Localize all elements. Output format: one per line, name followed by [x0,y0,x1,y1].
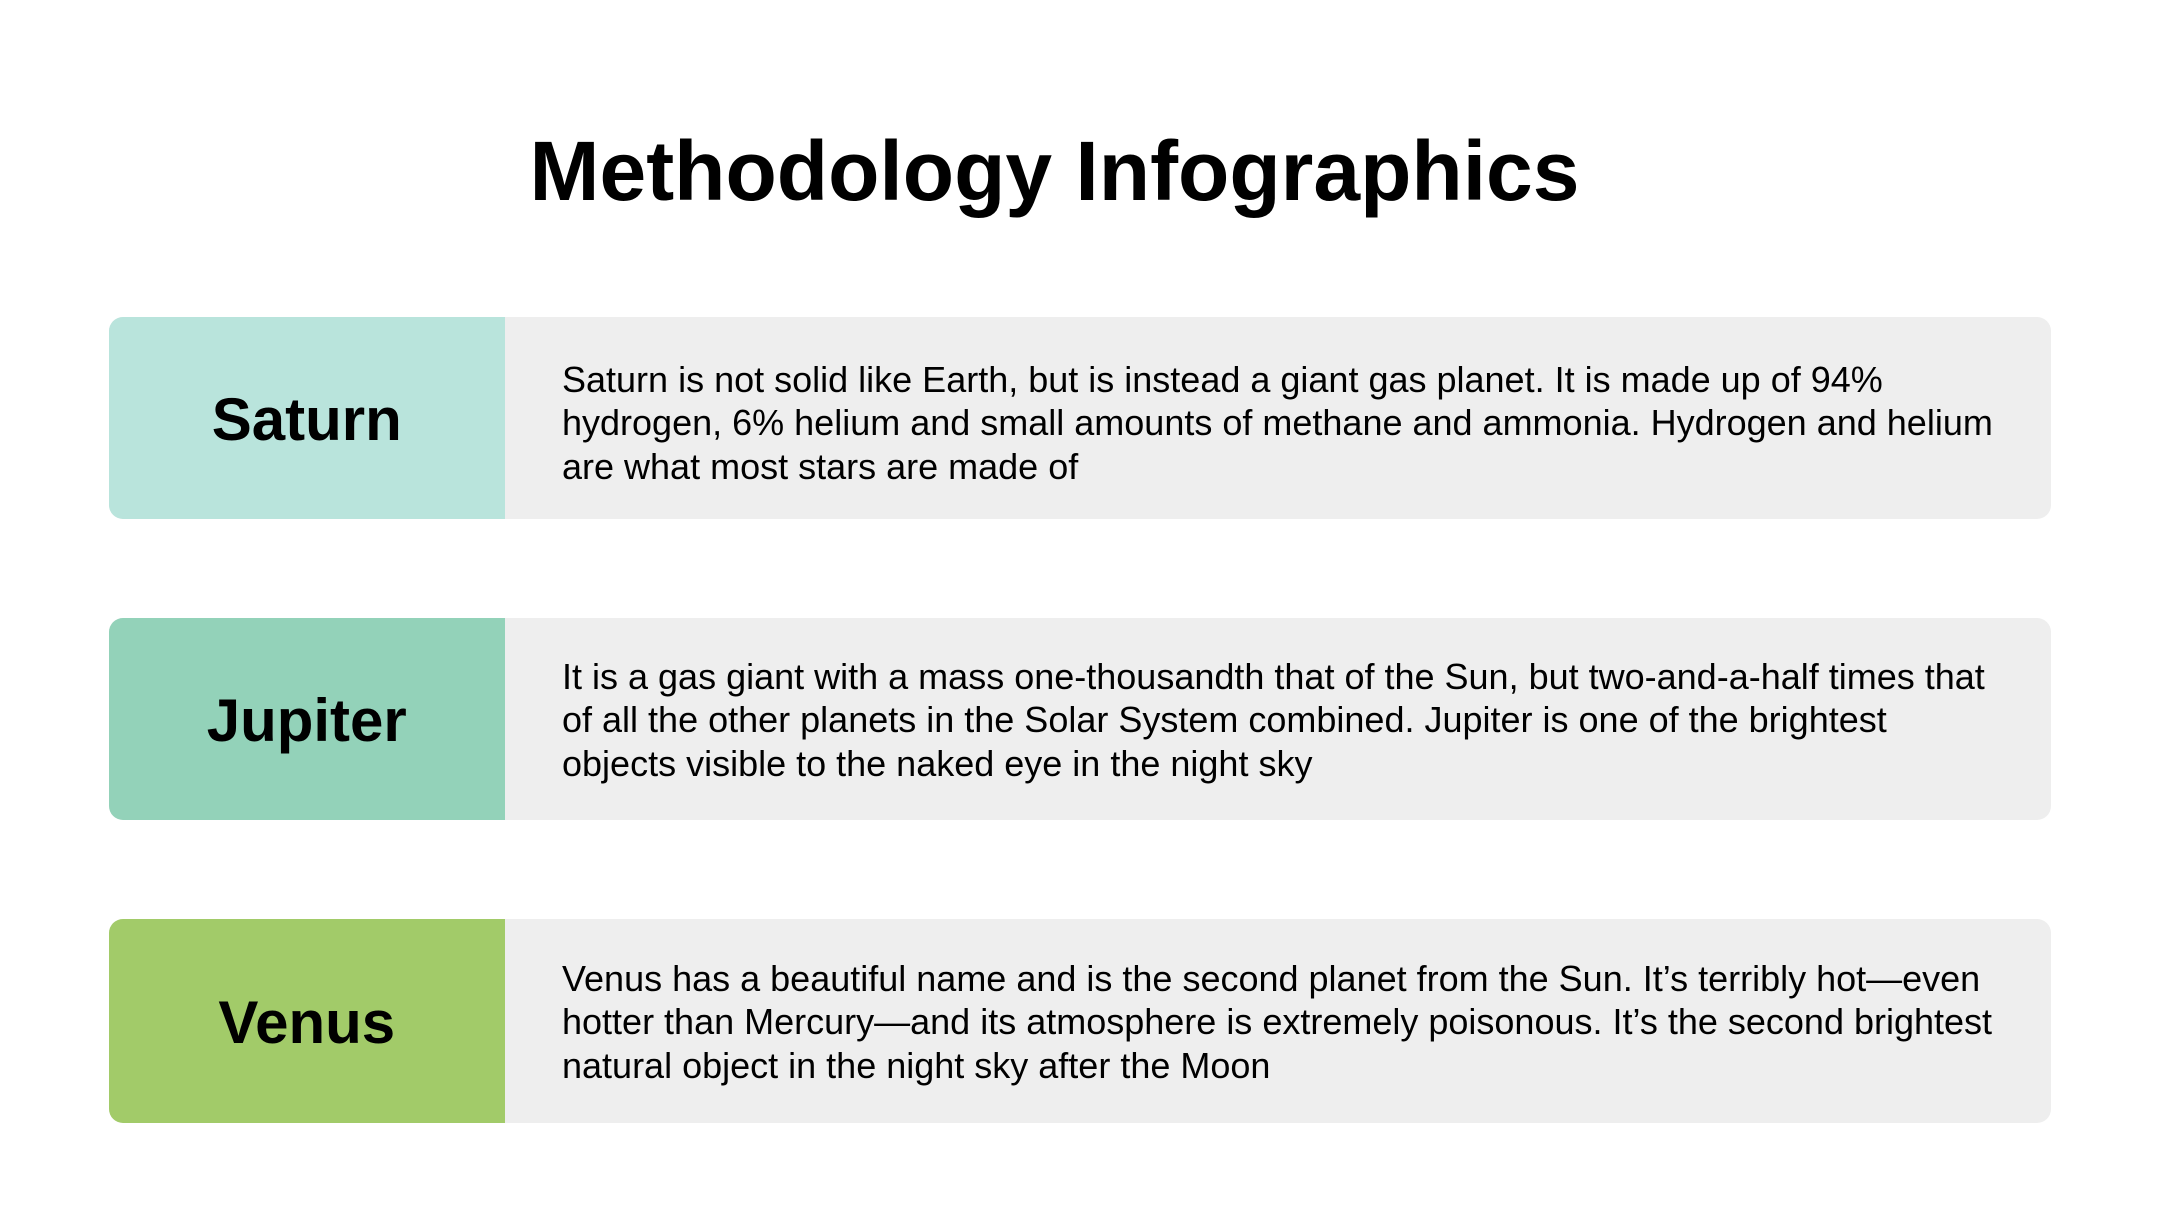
text: Jupiter description: objects visible to the naked eye in the night sky [562,743,1312,784]
text: Venus description: natural object in the night sky after the Moon [562,1045,1270,1086]
text: Jupiter description: It is a gas giant with a mass one-thousandth that of the Sun, but two-and-a-half times that [562,656,1985,697]
text: Saturn description: Saturn is not solid like Earth, but is instead a giant gas planet. It is made up of 94% [562,359,1883,400]
text: Saturn description: hydrogen, 6% helium and small amounts of methane and ammonia. Hydrogen and helium [562,402,1993,443]
label: Saturn [109,317,504,519]
text: Saturn description [562,359,1993,487]
text: Venus description: hotter than Mercury—and its atmosphere is extremely poisonous. It’s the second brightest [562,1001,1992,1042]
text: Jupiter description: of all the other planets in the Solar System combined. Jupiter is one of the brightest [562,699,1887,740]
label: Jupiter: Jupiter [207,687,407,754]
panel: Jupiter [109,618,2051,820]
text: Venus description [562,958,1992,1086]
label: Venus: Venus [218,989,395,1056]
text: Venus description: Venus has a beautiful name and is the second planet from the Sun. It’s terribly hot—even [562,958,1980,999]
panel: Saturn [109,317,2051,519]
label: Saturn: Saturn [212,386,402,453]
text: Saturn description: are what most stars are made of [562,446,1078,487]
label: Venus [109,919,504,1123]
label: Jupiter [109,618,504,820]
text: Jupiter description [562,656,1985,784]
title: Methodology Infographics [530,124,1579,218]
panel: Venus [109,919,2051,1123]
